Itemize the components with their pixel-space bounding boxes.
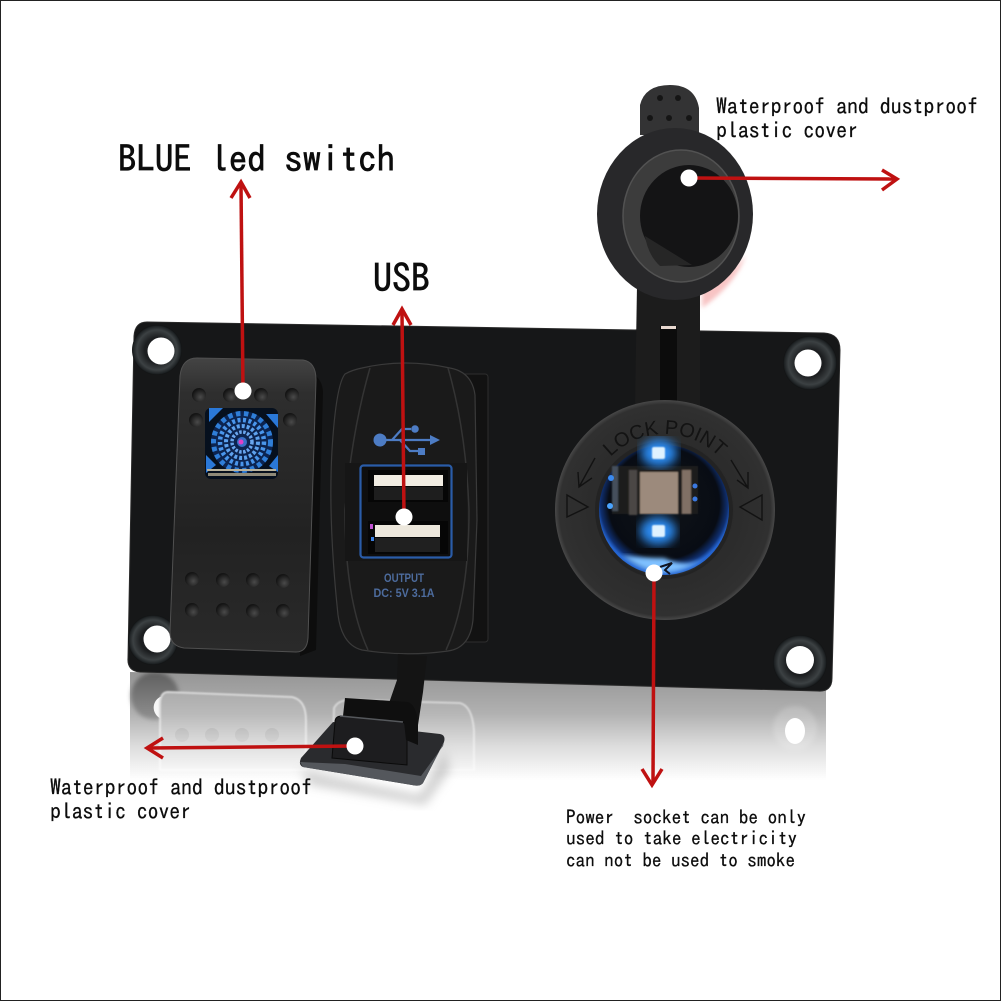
arrow: cap (680, 170, 897, 190)
red glow behind cap (702, 255, 746, 308)
lock point lettering: LOCK POINT (602, 420, 728, 456)
text: usb cover note (50, 776, 312, 822)
text: usb cover note: plastic cover (50, 800, 191, 822)
text: power socket note: used to take electricity (566, 829, 797, 848)
panel: usb module (331, 363, 488, 654)
text: power socket note (566, 808, 806, 870)
text: cap cover note (716, 95, 978, 141)
usb port lower (368, 521, 448, 554)
usb output rating text (374, 573, 434, 600)
icon: usb symbol (374, 425, 440, 455)
icon: mounting hole top right (783, 336, 837, 390)
text: cap cover note: Waterproof and dustproof (716, 95, 978, 117)
socket cap strap (635, 285, 700, 408)
arrow: blue led switch (231, 182, 252, 400)
heading: blue led switch: BLUE led switch (118, 140, 395, 177)
icon: mounting hole top left (132, 325, 182, 375)
usb cover strap (388, 654, 427, 725)
icon: ring arrows and triangles (567, 458, 762, 520)
cover drop shadow (300, 750, 450, 805)
arrow: usb cover (147, 738, 364, 758)
usb output rating text: OUTPUT (384, 573, 424, 585)
text: power socket note: Power socket can be only (566, 808, 806, 827)
text: power socket note: can not be used to smoke (566, 851, 795, 870)
socket contacts (612, 466, 698, 515)
led glows (607, 439, 708, 574)
icon: mounting hole bottom right (773, 635, 827, 689)
icon: mounting hole bottom left (128, 615, 178, 665)
icon: switch dimples bottom (185, 572, 290, 618)
panel: rocker switch (170, 358, 323, 656)
text: cap cover note: plastic cover (716, 119, 858, 141)
arrow: power socket (642, 564, 662, 785)
usb port upper (368, 470, 448, 502)
icon: blue led window (205, 408, 278, 479)
socket cap with tab (597, 85, 753, 300)
power socket (555, 400, 775, 620)
reflection of panel (120, 672, 835, 792)
icon: switch dimples top (189, 388, 299, 427)
usb port housing (345, 463, 467, 561)
heading: usb: USB (373, 259, 430, 297)
usb dust cover (300, 698, 444, 786)
arrow: usb (393, 309, 412, 526)
usb output rating text: DC: 5V 3.1A (374, 588, 434, 600)
text: usb cover note: Waterproof and dustproof (50, 776, 312, 798)
panel: mounting plate (128, 322, 840, 691)
